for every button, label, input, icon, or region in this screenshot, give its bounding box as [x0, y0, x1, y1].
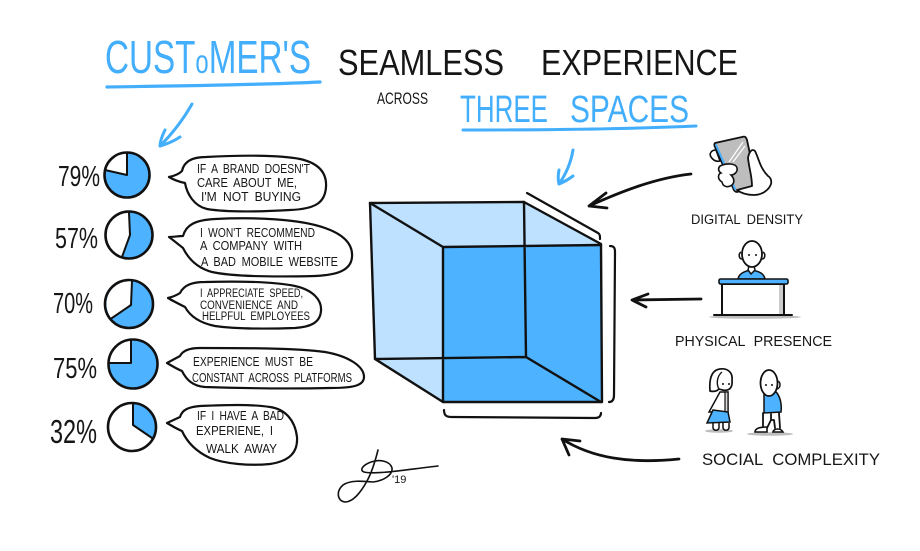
phone	[714, 137, 756, 192]
arrow: physical presence to cube	[632, 294, 701, 307]
arrow: customer's to pies	[160, 104, 192, 146]
speech bubble 5: WALK AWAY	[206, 442, 278, 456]
row: 70 percent	[53, 280, 321, 329]
cube	[370, 193, 615, 418]
bracket: right edge	[609, 246, 615, 402]
speech bubble 1	[169, 156, 326, 211]
arrow: digital density to cube	[589, 174, 691, 208]
title: seamless experience	[338, 42, 738, 83]
percent label 57: 57%	[55, 223, 98, 255]
speech bubble 5	[167, 405, 297, 465]
speech bubble 4: EXPERIENCE MUST BE	[193, 355, 313, 369]
speech bubble 1: I'M NOT BUYING	[201, 190, 301, 204]
person	[738, 241, 765, 279]
speech bubble 4	[167, 348, 364, 388]
speech bubble 5: IF I HAVE A BAD	[197, 409, 284, 423]
bracket: top edge	[527, 193, 600, 239]
speech bubble 3	[168, 282, 321, 329]
speech bubble 2	[169, 218, 352, 277]
row: 32 percent	[50, 403, 297, 465]
pie chart 79	[104, 152, 150, 198]
row: 79 percent	[58, 152, 326, 211]
pie chart 75	[108, 340, 158, 388]
speech bubble 3: CONVENIENCE AND	[200, 300, 298, 312]
title: seamless experience: EXPERIENCE	[541, 42, 738, 83]
pie chart 32	[108, 403, 156, 451]
bracket: bottom edge	[444, 410, 601, 418]
signature	[338, 450, 438, 502]
speech bubble 3: HELPFUL EMPLOYEES	[202, 311, 310, 323]
speech bubble 5: EXPERIENE, I	[196, 424, 273, 438]
fingers	[718, 164, 737, 187]
speech bubble 4: CONSTANT ACROSS PLATFORMS	[192, 371, 352, 385]
woman	[705, 369, 733, 433]
title: Customer's: CUSToMER'S	[105, 31, 311, 83]
icon: hand holding phone	[710, 137, 771, 195]
speech bubble 3: I APPRECIATE SPEED,	[200, 288, 303, 300]
phone edge highlight	[716, 145, 735, 189]
pie chart 57	[105, 211, 152, 258]
phone glare	[729, 142, 745, 162]
label: physical presence: PHYSICAL PRESENCE	[675, 333, 832, 350]
title: three spaces	[460, 89, 696, 131]
percent label 32: 32%	[50, 413, 97, 450]
icon: two people	[705, 369, 793, 436]
percent label 75: 75%	[53, 353, 97, 385]
row: 75 percent	[53, 340, 364, 388]
speech bubble 2: I WON'T RECOMMEND	[200, 226, 315, 240]
icon: person at desk	[709, 241, 801, 319]
label: social complexity: SOCIAL COMPLEXITY	[702, 450, 880, 469]
title: seamless experience: SEAMLESS	[338, 42, 504, 83]
speech bubble 2: A BAD MOBILE WEBSITE	[201, 255, 338, 269]
title: three spaces: SPACES	[570, 89, 689, 131]
percent label 79: 79%	[58, 161, 100, 193]
index finger behind phone	[710, 150, 720, 161]
pie chart 70	[105, 280, 153, 328]
speech bubble 2: A COMPANY WITH	[200, 239, 302, 253]
speech bubble 1: IF A BRAND DOESN'T	[197, 162, 310, 176]
label: digital density: DIGITAL DENSITY	[691, 212, 803, 227]
row: 57 percent	[55, 211, 352, 277]
desk	[709, 279, 801, 319]
arrow: three spaces to cube	[558, 150, 573, 184]
arrow: social complexity to cube	[562, 439, 679, 461]
percent label 70: 70%	[53, 288, 93, 320]
hand	[737, 150, 771, 195]
man	[747, 370, 793, 436]
speech bubble 1: CARE ABOUT ME,	[197, 176, 297, 190]
title: across: ACROSS	[377, 89, 428, 108]
title: three spaces: THREE	[460, 89, 548, 131]
signature: '19	[392, 474, 406, 486]
